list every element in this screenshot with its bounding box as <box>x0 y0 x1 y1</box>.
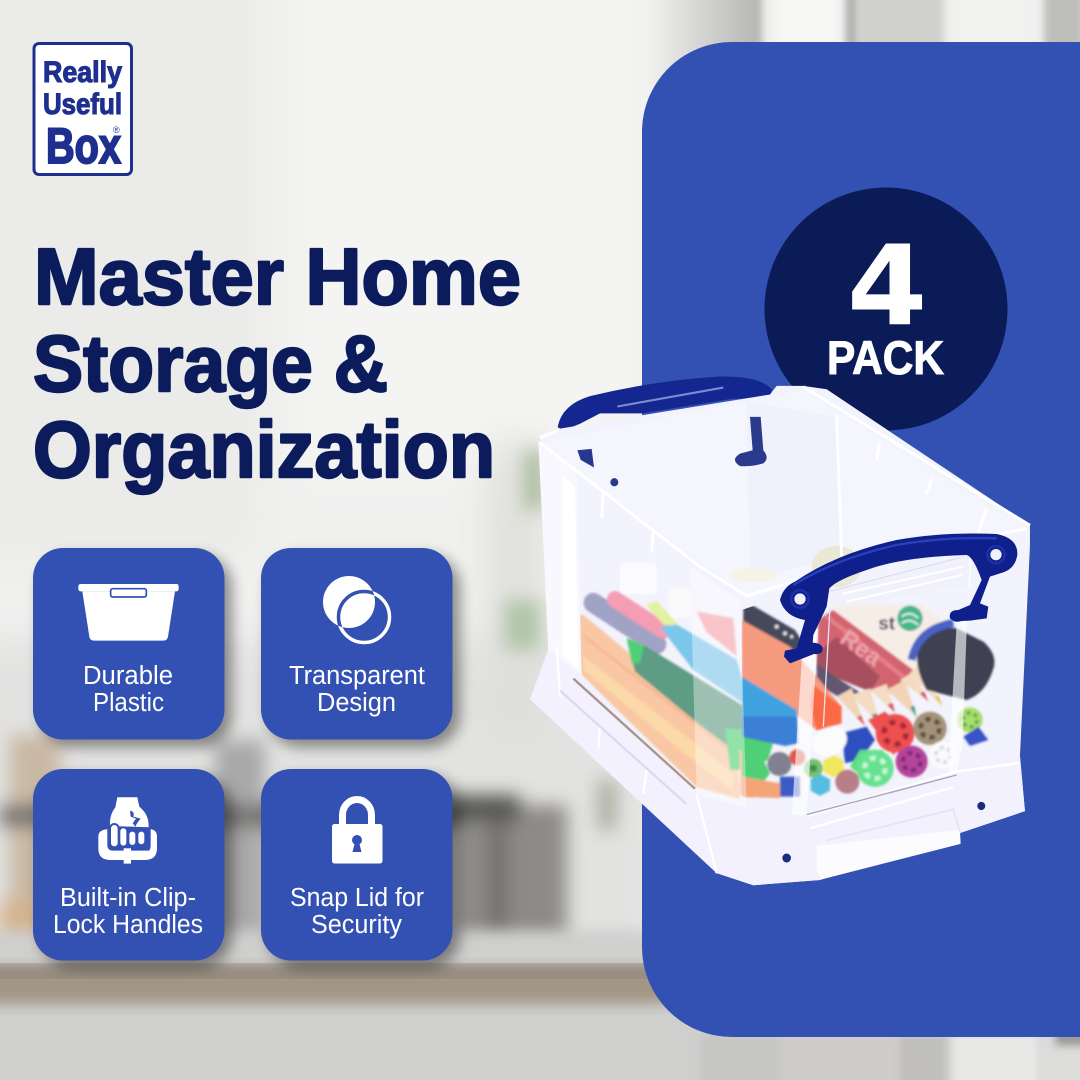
bottom strip stripes <box>700 1030 1080 1080</box>
logo: Really Useful Box: ® <box>113 125 120 135</box>
label: Snap Lid for Security <box>290 884 424 939</box>
marker cap <box>912 623 994 700</box>
rear handle <box>558 376 772 431</box>
badge: 4 Pack: PACK <box>827 331 944 384</box>
contents seen through long side <box>567 587 773 799</box>
title: Master Home Storage & Organization <box>33 232 521 494</box>
box walls and rear clips <box>530 386 1030 885</box>
card: Durable Plastic <box>33 548 224 740</box>
icon: overlapping circles <box>323 576 390 642</box>
logo: Really Useful Box <box>34 44 132 174</box>
top strip stripes <box>650 0 762 140</box>
label: Durable Plastic <box>83 662 173 717</box>
badge: 4 Pack: 4 <box>847 221 927 350</box>
label: Built-in Clip-Lock Handles: Lock Handles <box>53 911 203 939</box>
title: Master Home Storage & Organization: Storage & <box>33 319 388 408</box>
pencil box, label and marker: st <box>878 612 895 633</box>
badge: 4 Pack <box>764 188 1008 430</box>
crayons <box>742 620 875 763</box>
pencil box, label and marker: Rea <box>835 624 887 672</box>
shadows under feature cards <box>40 555 460 968</box>
icon: hand on clip-lock handle <box>98 797 157 864</box>
icon: padlock <box>332 799 382 864</box>
product: clear storage box with handles and craft contents <box>530 376 1030 885</box>
clear plastic posts <box>538 441 967 818</box>
label: Durable Plastic: Plastic <box>93 689 164 717</box>
label: Transparent Design <box>289 662 425 717</box>
card: Built-in Clip-Lock Handles <box>33 769 224 960</box>
card: Snap Lid for Security <box>261 769 452 960</box>
contents seen through short end <box>742 555 994 798</box>
pencil tips <box>837 662 943 726</box>
title: Master Home Storage & Organization: Master Home <box>34 232 521 321</box>
card: Transparent Design <box>261 548 452 740</box>
logo: Really Useful Box: Really <box>43 56 122 89</box>
front clip tab <box>817 830 961 879</box>
rims and base <box>530 387 1030 885</box>
clear label panel over contents <box>823 555 970 727</box>
label: Transparent Design: Design <box>317 689 396 717</box>
panel: blue right panel <box>642 42 1080 1037</box>
label: Built-in Clip-Lock Handles: Built-in Clip- <box>60 884 196 912</box>
label: Snap Lid for Security: Security <box>311 911 402 939</box>
logo: Really Useful Box: Box <box>46 118 121 174</box>
icon: plastic tub <box>78 584 179 641</box>
label: Durable Plastic: Durable <box>83 662 173 690</box>
label: Built-in Clip-Lock Handles <box>53 884 203 939</box>
logo: Really Useful Box: Useful <box>43 88 122 121</box>
pencil box, label and marker <box>743 600 945 700</box>
front handle <box>780 533 1017 663</box>
label: Transparent Design: Transparent <box>289 662 425 690</box>
title: Master Home Storage & Organization: Organization <box>33 405 495 494</box>
wheel-end crayons <box>742 707 988 798</box>
label: Snap Lid for Security: Snap Lid for <box>290 884 424 912</box>
rim holes <box>782 854 791 862</box>
